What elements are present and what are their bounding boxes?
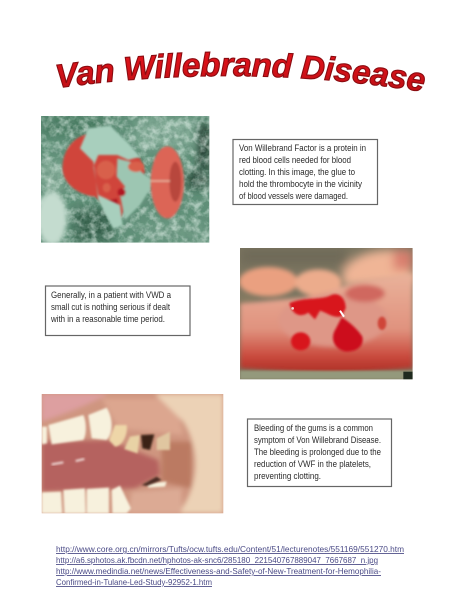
text box: bleeding gums: The bleeding is prolonged due to the bbox=[254, 447, 381, 457]
text box: small cuts: with in a reasonable time period. bbox=[50, 314, 165, 324]
source links: http://www.core.org.cn/mirrors/Tufts/ocw.tufts.edu/Content/51/lecturenotes/551169/551270.htm bbox=[56, 544, 404, 554]
text box: small cuts bbox=[46, 286, 190, 336]
text box: small cuts: small cut is nothing serious if dealt bbox=[51, 302, 170, 312]
teeth bbox=[42, 408, 170, 513]
blood bbox=[289, 294, 386, 351]
text box: bleeding gums: reduction of VWF in the platelets, bbox=[254, 459, 371, 469]
text box: Von Willebrand factor: clotting. In this image, the glue to bbox=[239, 167, 355, 177]
text box: bleeding gums: preventing clotting. bbox=[254, 471, 321, 481]
photo: bleeding gums bbox=[42, 394, 223, 513]
photo: red blood cells bbox=[37, 116, 209, 245]
text box: Von Willebrand factor bbox=[233, 140, 378, 204]
text box: Von Willebrand factor: Von Willebrand Factor is a protein in bbox=[239, 143, 366, 153]
photo: bleeding finger bbox=[239, 248, 413, 379]
right red cell bbox=[151, 146, 184, 218]
text box: small cuts: Generally, in a patient with VWD a bbox=[51, 290, 171, 300]
source links: Confirmed-in-Tulane-Led-Study-92952-1.htm bbox=[56, 577, 212, 587]
text box: Von Willebrand factor: of blood vessels were damaged. bbox=[239, 191, 348, 201]
text box: Von Willebrand factor: red blood cells needed for blood bbox=[239, 155, 351, 165]
title: Van Willebrand Disease bbox=[56, 52, 425, 92]
source links: http://www.medindia.net/news/Effectiveness-and-Safety-of-New-Treatment-for-Hemophilia- bbox=[56, 566, 381, 576]
text box: bleeding gums: symptom of Von Willebrand Disease. bbox=[254, 435, 381, 445]
left red cell bbox=[63, 134, 145, 218]
text box: bleeding gums bbox=[248, 419, 392, 486]
text box: Von Willebrand factor: hold the thrombocyte in the vicinity bbox=[239, 179, 363, 189]
fibrin mesh bbox=[80, 126, 155, 229]
source links bbox=[56, 544, 404, 587]
text box: bleeding gums: Bleeding of the gums is a common bbox=[254, 423, 373, 433]
source links: http://a6.sphotos.ak.fbcdn.net/hphotos-ak-snc6/285180_221540767889047_7667687_n.jpg bbox=[56, 555, 378, 565]
